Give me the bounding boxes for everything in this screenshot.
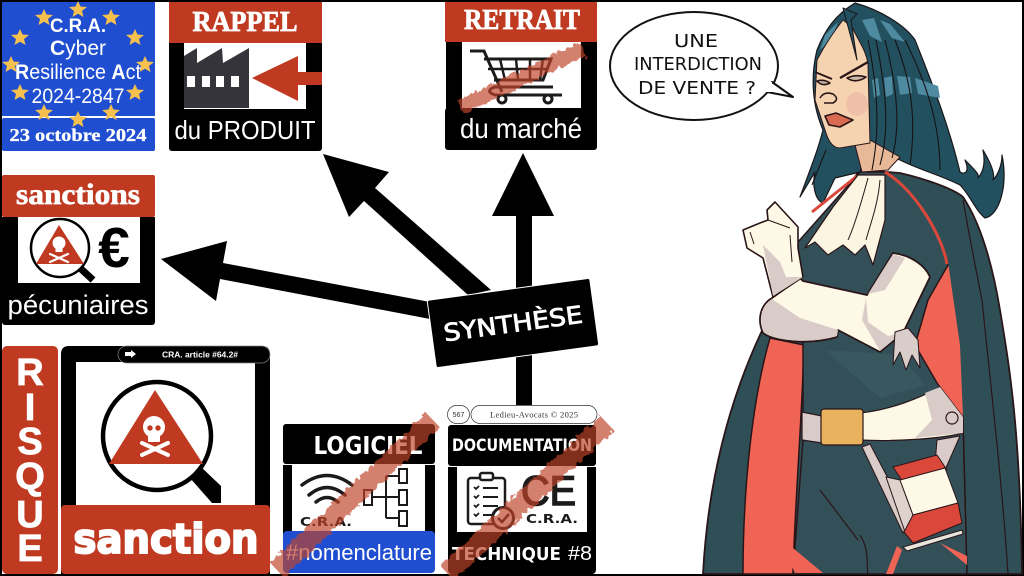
cape fold lines: [820, 200, 1008, 574]
torso and legs: [793, 172, 967, 574]
panel: sanction: [61, 346, 270, 574]
page number pill: 567: [453, 412, 464, 419]
heading: RAPPEL: RAPPEL: [192, 7, 298, 38]
icon label: C.R.A.: C.R.A.: [526, 512, 578, 526]
heading: sanctions: sanctions: [16, 178, 140, 211]
icon: wifi: [302, 476, 352, 502]
cape lining right: [905, 262, 963, 417]
face: [815, 20, 870, 148]
panel: logiciel nomenclature: [283, 424, 435, 573]
panel: documentation technique: [448, 425, 596, 574]
hair highlights: [820, 18, 940, 98]
leg straps: [787, 543, 967, 574]
fist shadow: [763, 245, 803, 296]
cheek blush: [846, 92, 868, 116]
hair: [800, 3, 1004, 218]
panel: risque vertical label: Q: [15, 456, 45, 498]
heading: LOGICIEL: LOGICIEL: [314, 431, 423, 460]
icon: red return arrow: [252, 56, 322, 101]
label: du marché: du marché: [460, 113, 582, 144]
heading: RETRAIT: RETRAIT: [464, 5, 580, 36]
label: #nomenclature: #nomenclature: [286, 540, 432, 565]
stripe: documentation crossed out: [447, 423, 607, 573]
label: du PRODUIT: du PRODUIT: [174, 115, 316, 145]
page number pill: [448, 406, 470, 424]
speech bubble: [610, 12, 793, 120]
cape lining left: [743, 338, 804, 574]
label: TECHNIQUE #8: TECHNIQUE: [452, 544, 561, 565]
label: sanction: sanction: [74, 515, 258, 563]
arrow: to sanctions: [161, 241, 430, 319]
icon: checklist clipboard: [468, 473, 514, 528]
heading: DOCUMENTATION: DOCUMENTATION: [452, 436, 592, 456]
dress shade: [825, 350, 925, 398]
jabot: [805, 175, 885, 265]
fist: [743, 202, 803, 297]
speech bubble: DE VENTE ?: [638, 78, 756, 99]
illustration: woman in cape: [703, 3, 1022, 574]
arrow: to rappel: [323, 154, 491, 295]
stripe: logiciel crossed out: [277, 420, 433, 570]
badge text: Cyber: [50, 37, 106, 60]
badge text: C.R.A.: [50, 16, 106, 37]
book pouch: [862, 436, 963, 551]
reference pill: CRA article: [118, 346, 270, 363]
label: SYNTHÈSE: [427, 278, 599, 368]
neck: [855, 140, 900, 172]
speech bubble: UNE: [674, 31, 718, 52]
panel: risque vertical label: E: [17, 528, 43, 570]
label: SYNTHÈSE: SYNTHÈSE: [442, 300, 584, 347]
hair strand: [843, 8, 857, 60]
label: TECHNIQUE #8: #8: [568, 543, 592, 565]
icon: tree nomenclature: [364, 469, 407, 526]
panel: risque vertical label: R: [16, 352, 44, 394]
fist finger lines: [750, 220, 792, 262]
hand on hip: [893, 328, 920, 370]
copyright pill: [471, 406, 597, 424]
collar stripes: [812, 172, 947, 264]
icon: euro sign: €: [98, 216, 130, 280]
panel: sanctions pécuniaires: [2, 175, 155, 325]
icon: factory: [184, 48, 249, 108]
icon label: C.R.A.: C.R.A.: [300, 515, 352, 529]
belt: [802, 387, 963, 445]
icon: shopping cart: [470, 51, 562, 103]
panel: risque vertical label: S: [17, 421, 43, 463]
glove shadow: [761, 254, 905, 351]
icon: magnifier with skull triangle: [31, 219, 93, 280]
cape: [703, 170, 1022, 574]
icon: large magnifier with skull triangle: [103, 382, 221, 503]
badge text: 23 octobre 2024: [10, 125, 146, 145]
panel: risque vertical label: U: [16, 494, 44, 536]
panel: risque vertical label: I: [25, 387, 35, 429]
label: pécuniaires: pécuniaires: [8, 290, 148, 320]
panel: rappel du produit: [169, 2, 322, 151]
arrow: to retrait: [492, 153, 554, 405]
stripe: crossed out: [460, 49, 583, 107]
panel: retrait du marché: [445, 2, 597, 150]
panel: C.R.A. title badge: [2, 1, 155, 151]
jabot folds: [848, 178, 880, 240]
badge text: Resilience Act: [15, 61, 141, 84]
icon: CE mark: CE: [521, 467, 576, 514]
hair strand lines: [812, 40, 940, 185]
gloved arms: [760, 253, 930, 352]
badge text: 2024-2847: [32, 85, 124, 108]
speech bubble: INTERDICTION: [634, 54, 762, 75]
panel: risque vertical label: [2, 346, 58, 574]
copyright pill: Ledieu-Avocats © 2025: [490, 410, 578, 420]
facial features: [815, 62, 868, 127]
badge text: [10, 16, 146, 145]
icon: European stars: [2, 1, 154, 127]
reference pill: CRA article: CRA. article #64.2#: [162, 350, 238, 360]
